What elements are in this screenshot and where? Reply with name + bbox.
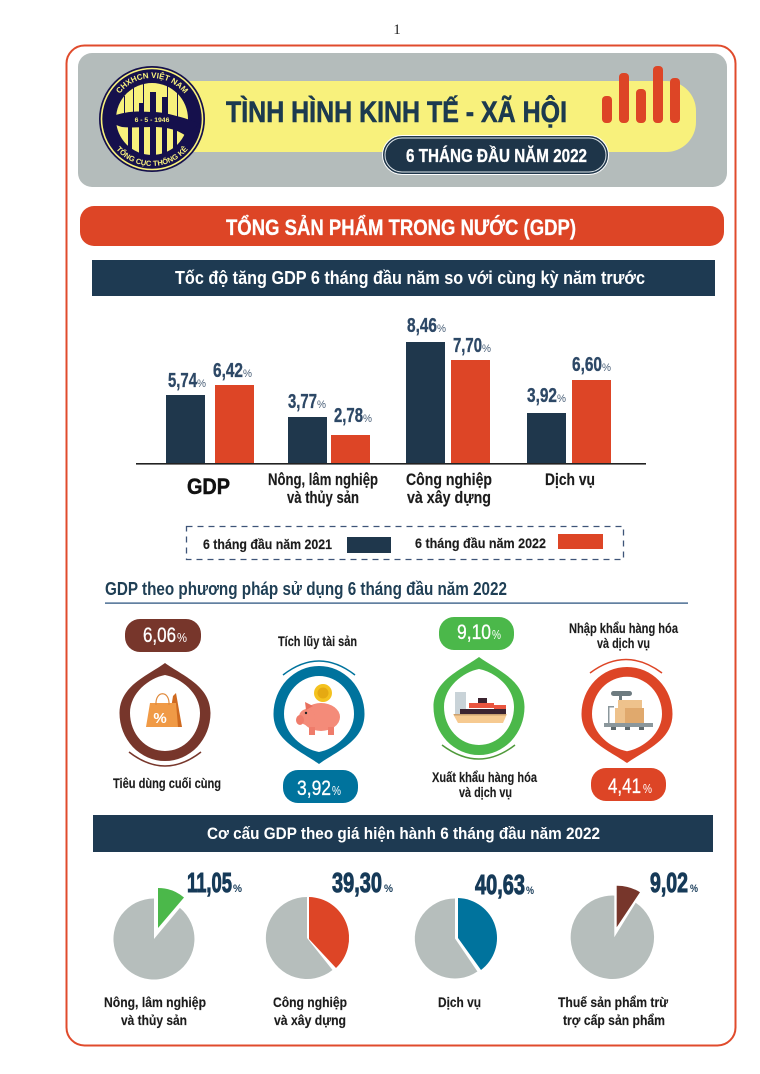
heading bar: growth xyxy=(92,260,715,296)
period pill: 6 THÁNG ĐẦU NĂM 2022 xyxy=(406,145,587,166)
item: imports xyxy=(569,620,678,801)
item: final consumption xyxy=(113,619,221,791)
icon: logo: CHXHCN VIỆT NAM xyxy=(116,72,188,94)
services group: 6,60 xyxy=(572,354,602,376)
agriculture group xyxy=(268,391,378,507)
services group: Dịch vụ xyxy=(545,471,595,489)
pie: industry: % xyxy=(384,883,393,895)
agriculture group: % xyxy=(363,413,372,425)
pie: taxes: Thuế sản phẩm trừ xyxy=(558,994,669,1010)
item: exports: và dịch vụ xyxy=(459,784,512,800)
page number: 1 xyxy=(393,22,401,38)
heading: expenditure method: GDP theo phương pháp sử dụng 6 tháng đầu năm 2022 xyxy=(105,579,507,599)
icon: logo: TỔNG CỤC THỐNG KÊ xyxy=(117,146,188,166)
pie: services: 40,63 xyxy=(475,869,525,900)
icon: logo: 6 - 5 - 1946 xyxy=(135,117,170,124)
pie: services: % xyxy=(526,885,534,897)
title: TÌNH HÌNH KINH TẾ - XÃ HỘI xyxy=(226,95,567,129)
section banner: GDP xyxy=(80,206,724,246)
pie: agriculture: Nông, lâm nghiệp xyxy=(104,994,206,1010)
pie: services: Dịch vụ xyxy=(438,994,481,1010)
pie: industry: 39,30 xyxy=(332,867,382,898)
item: final consumption: Tiêu dùng cuối cùng xyxy=(113,775,221,791)
services group: % xyxy=(602,362,611,374)
item: capital formation: 3,92 xyxy=(297,777,331,800)
GDP group: 5,74 xyxy=(168,370,198,392)
pie: industry: và xây dựng xyxy=(274,1012,346,1028)
icon: piggy bank xyxy=(296,684,340,735)
services group: % xyxy=(557,393,566,405)
icon: shopping bag: % xyxy=(153,710,167,727)
item: imports: và dịch vụ xyxy=(597,635,650,651)
industry group: Công nghiệp xyxy=(406,471,492,489)
pie: agriculture: 11,05 xyxy=(187,867,232,898)
industry group: % xyxy=(437,323,446,335)
pie: industry: Công nghiệp xyxy=(273,994,347,1010)
GDP group: % xyxy=(197,378,206,390)
pie: taxes: trợ cấp sản phẩm xyxy=(563,1012,665,1028)
item: exports: % xyxy=(492,627,501,642)
section banner: GDP: TỔNG SẢN PHẨM TRONG NƯỚC (GDP) xyxy=(226,215,576,240)
agriculture group: 3,77 xyxy=(288,391,317,413)
services group xyxy=(527,354,611,489)
pie: taxes xyxy=(558,867,698,1028)
heading bar: structure: Cơ cấu GDP theo giá hiện hành 6 tháng đầu năm 2022 xyxy=(207,824,600,843)
period pill xyxy=(382,136,608,174)
GDP group: 6,42 xyxy=(213,360,243,382)
item: exports: 9,10 xyxy=(457,621,491,644)
industry group: 7,70 xyxy=(453,335,482,357)
item: exports xyxy=(432,617,537,800)
pie: agriculture xyxy=(104,867,242,1028)
icon: scale with boxes xyxy=(604,691,653,730)
heading bar: growth: Tốc độ tăng GDP 6 tháng đầu năm so với cùng kỳ năm trước xyxy=(175,268,645,288)
yellow title band xyxy=(150,81,696,152)
pie: agriculture: % xyxy=(233,883,242,895)
item: final consumption: % xyxy=(177,630,187,645)
icon: red bars xyxy=(602,66,680,123)
agriculture group: Nông, lâm nghiệp xyxy=(268,471,378,489)
icon: logo xyxy=(99,66,205,172)
GDP group xyxy=(166,360,254,499)
agriculture group: và thủy sản xyxy=(287,489,359,507)
item: capital formation xyxy=(274,633,364,803)
industry group: % xyxy=(482,343,491,355)
GDP group: GDP xyxy=(187,474,230,499)
heading bar: structure xyxy=(93,815,713,852)
icon: cargo ship xyxy=(453,692,507,723)
item: imports: % xyxy=(643,781,652,796)
industry group xyxy=(406,315,492,507)
industry group: 8,46 xyxy=(407,315,437,337)
legend: 6 tháng đầu năm 2022 xyxy=(415,535,546,551)
agriculture group: % xyxy=(317,399,326,411)
item: final consumption: 6,06 xyxy=(143,624,176,647)
item: capital formation: Tích lũy tài sản xyxy=(278,633,357,649)
pie: agriculture: và thủy sản xyxy=(121,1012,187,1028)
agriculture group: 2,78 xyxy=(334,405,363,427)
industry group: và xây dựng xyxy=(407,489,491,507)
GDP group: % xyxy=(243,368,252,380)
item: imports: 4,41 xyxy=(608,775,641,798)
pie: services xyxy=(415,869,534,1010)
pie: taxes: % xyxy=(690,883,698,895)
item: exports: Xuất khẩu hàng hóa xyxy=(432,769,537,785)
icon: shopping bag xyxy=(146,693,182,727)
bar chart: growth rates xyxy=(136,315,646,507)
services group: 3,92 xyxy=(527,385,557,407)
legend: 6 tháng đầu năm 2021 xyxy=(203,536,332,552)
item: capital formation: % xyxy=(332,783,341,798)
pie: taxes: 9,02 xyxy=(650,867,688,898)
item: imports: Nhập khẩu hàng hóa xyxy=(569,620,678,636)
pie: industry xyxy=(266,867,393,1028)
legend xyxy=(186,526,624,560)
panel: header xyxy=(78,53,727,187)
